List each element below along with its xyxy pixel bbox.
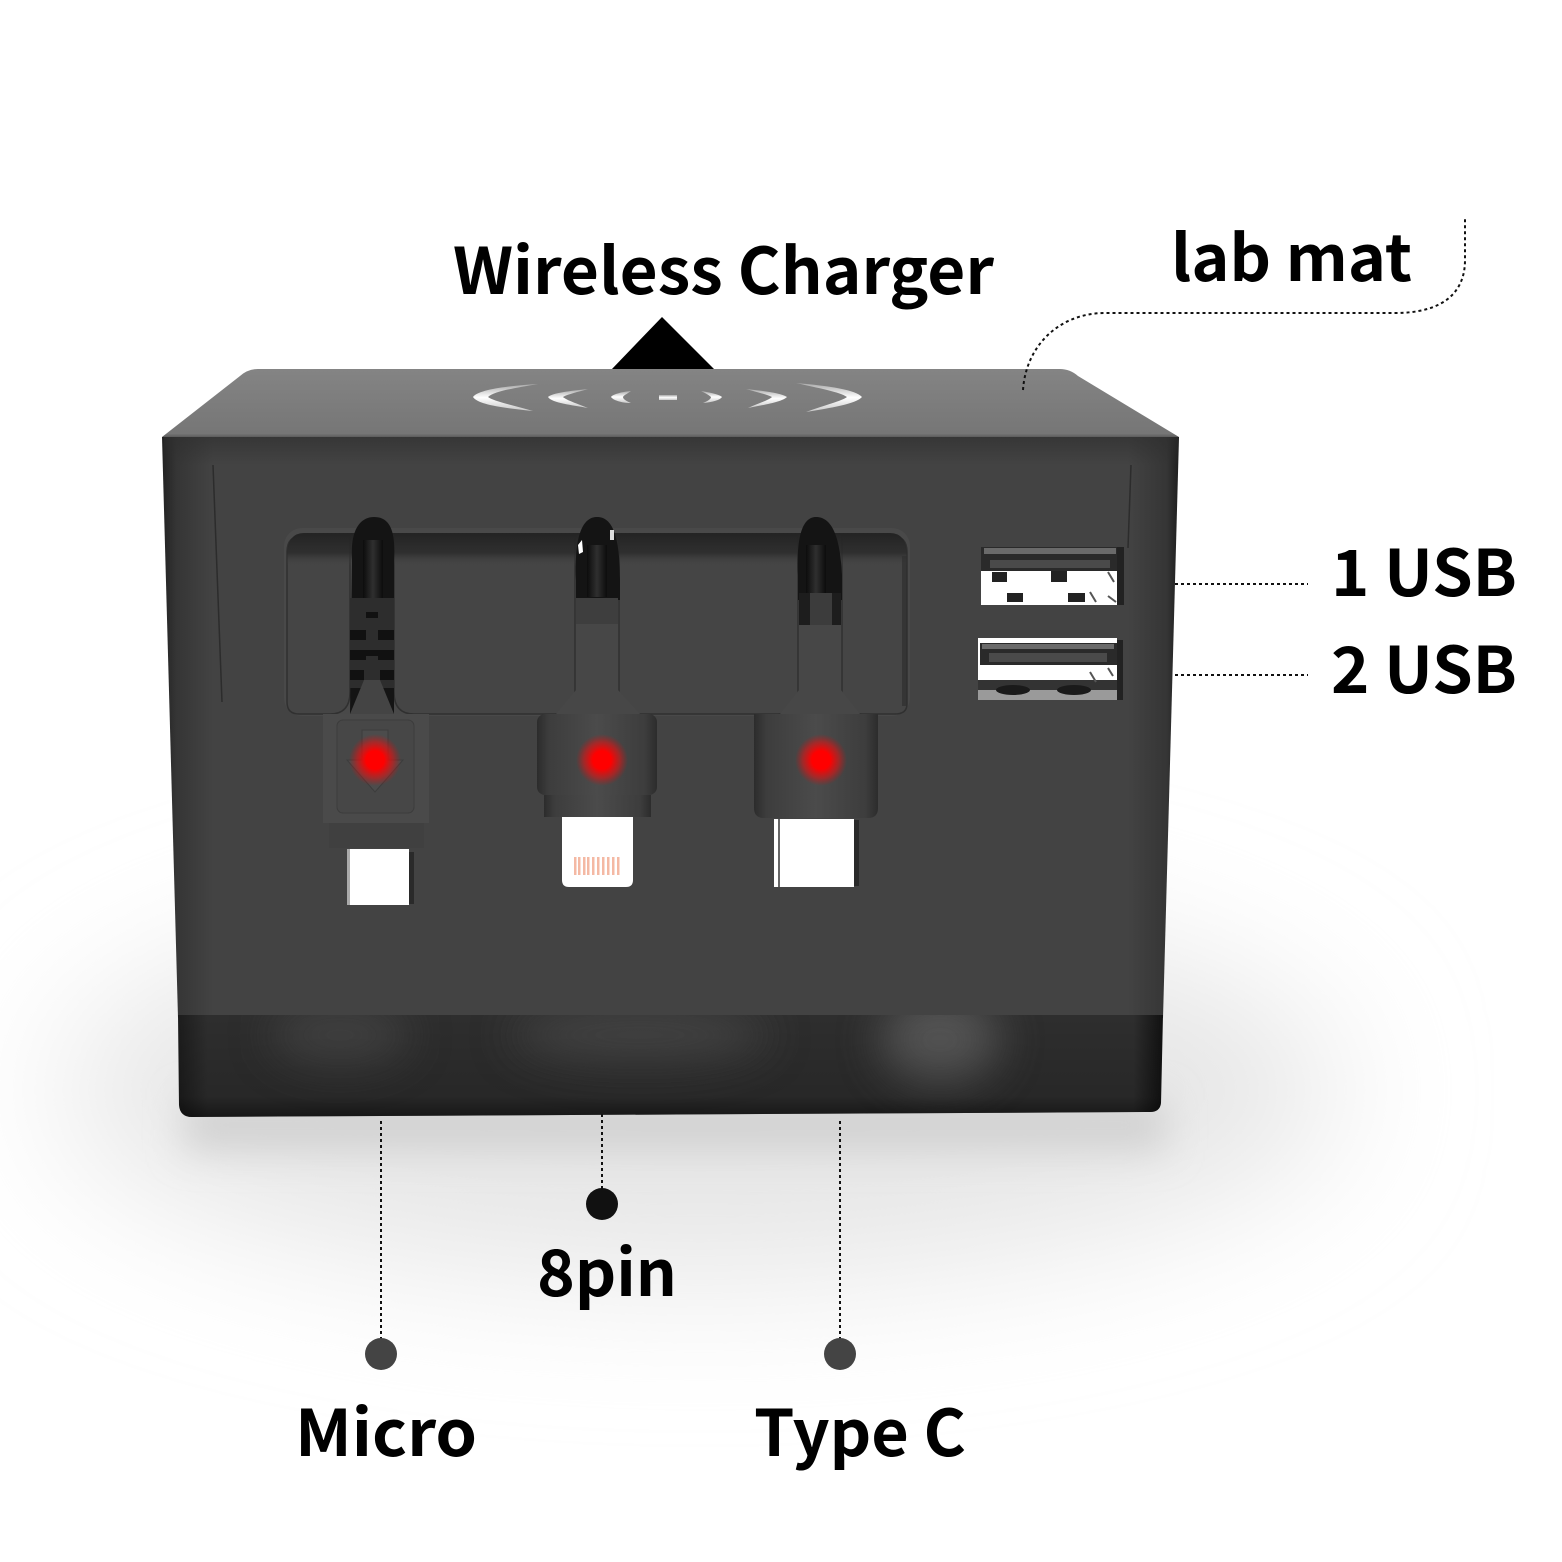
marker dot: Type C bbox=[824, 1338, 856, 1370]
cable: 8pin bbox=[537, 517, 657, 887]
8pin metal tip bbox=[562, 817, 633, 887]
leader line: 8pin bbox=[601, 1114, 603, 1190]
8pin contacts bbox=[574, 857, 620, 875]
base band bbox=[178, 1015, 1163, 1117]
type c metal tip bbox=[774, 819, 854, 887]
leader line: 2 USB bbox=[1175, 674, 1308, 676]
usb port 2 bbox=[978, 638, 1123, 700]
cable holder panel bbox=[284, 528, 910, 716]
leader line: Micro bbox=[380, 1121, 382, 1340]
product: charger cube bbox=[162, 369, 1179, 1117]
label: lab mat: lab mat bbox=[1171, 208, 1412, 300]
leader line: Type C bbox=[839, 1121, 841, 1340]
label: 8pin: 8pin bbox=[537, 1223, 677, 1315]
floor shadow bbox=[60, 900, 1340, 1280]
type c connector body bbox=[754, 714, 878, 818]
front face bbox=[162, 437, 1179, 1018]
holder segments bbox=[287, 536, 907, 714]
title: Wireless Charger: Wireless Charger bbox=[453, 221, 994, 313]
usb port 1 bbox=[981, 547, 1124, 605]
indicator light bbox=[795, 734, 847, 786]
leader line: lab mat bbox=[1023, 218, 1465, 390]
indicator light bbox=[349, 734, 401, 786]
marker dot: Micro bbox=[365, 1338, 397, 1370]
label: Type C: Type C bbox=[754, 1383, 966, 1475]
top face bbox=[162, 369, 1179, 437]
micro metal tip bbox=[347, 849, 409, 905]
arrow: wireless charger pointer bbox=[611, 317, 715, 370]
label: 2 USB: 2 USB bbox=[1331, 620, 1517, 712]
label: 1 USB: 1 USB bbox=[1331, 523, 1517, 615]
icon: wireless charging symbol bbox=[473, 383, 862, 412]
indicator light bbox=[576, 734, 628, 786]
8pin connector body bbox=[537, 714, 657, 795]
cable: type c bbox=[754, 517, 878, 887]
leader line: 1 USB bbox=[1175, 583, 1308, 585]
marker dot: 8pin bbox=[586, 1188, 618, 1220]
cable: micro bbox=[323, 517, 429, 905]
micro connector body bbox=[323, 714, 429, 823]
label: Micro: Micro bbox=[295, 1383, 477, 1475]
